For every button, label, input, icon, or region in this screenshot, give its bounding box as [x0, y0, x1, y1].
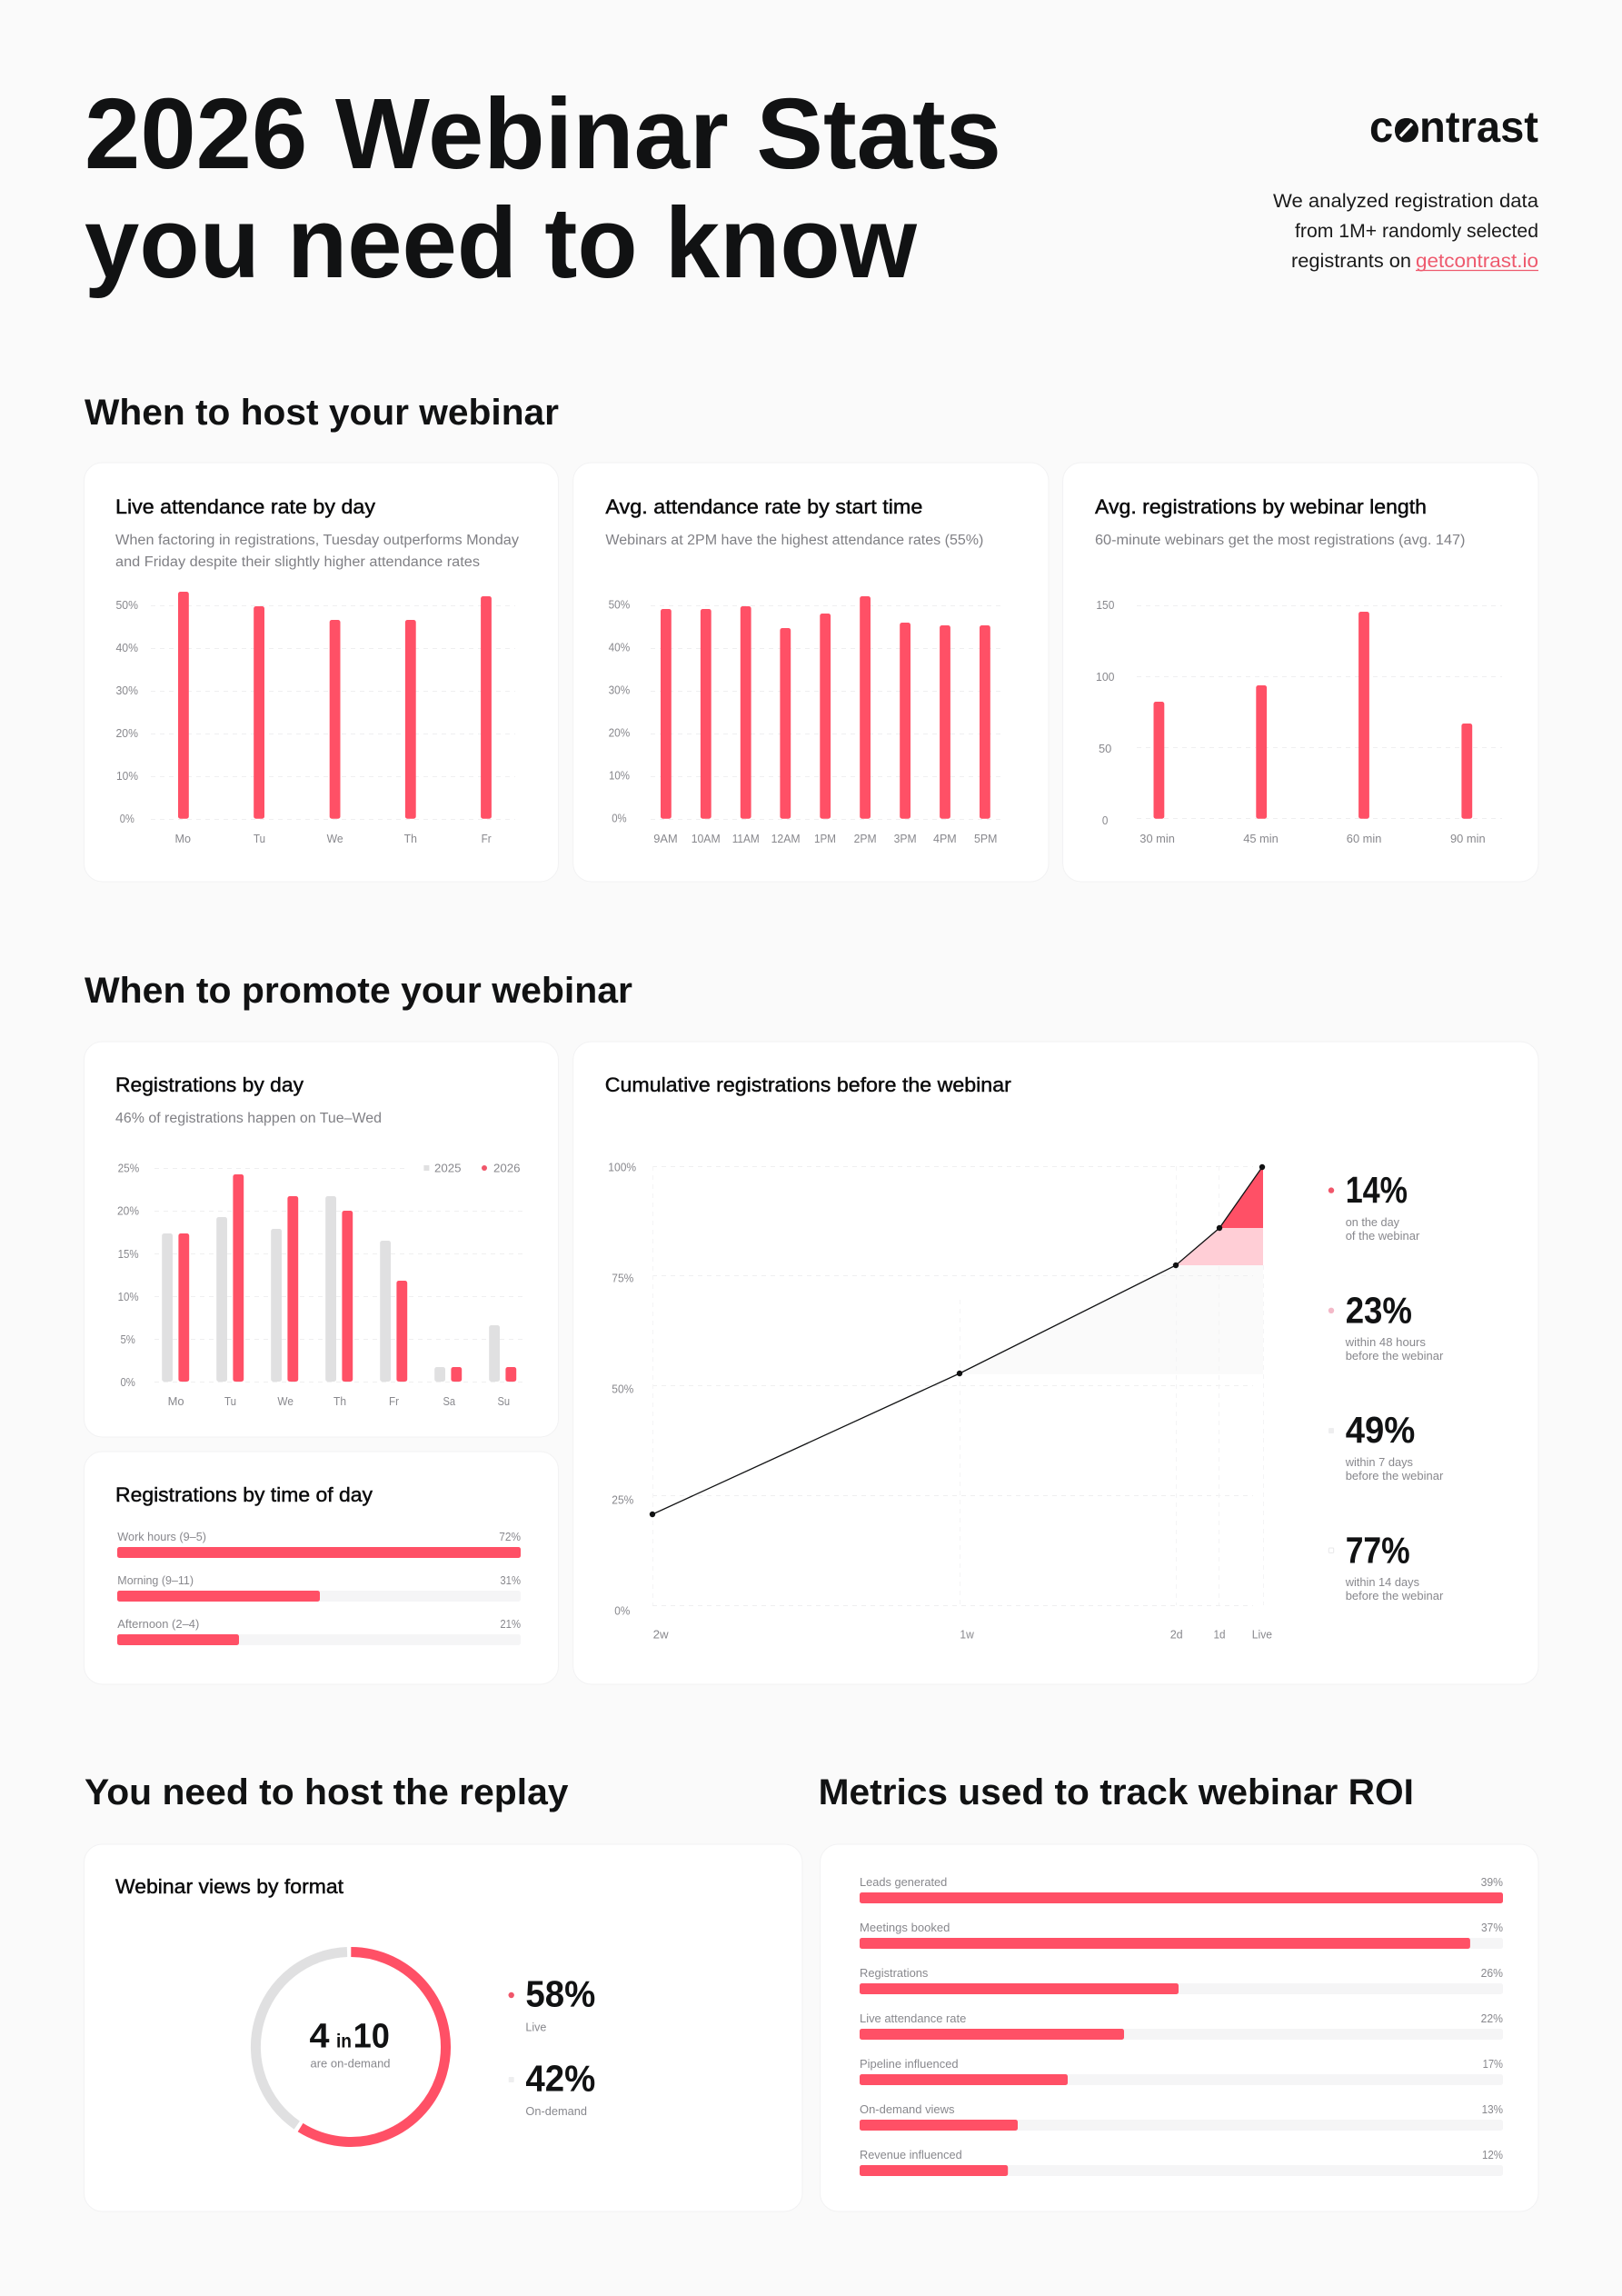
progress bars: metrics: 37%	[1481, 1921, 1503, 1934]
logo: contrast: contrast	[1369, 104, 1538, 152]
bar chart: registrations by length: 50	[1099, 742, 1111, 755]
line chart: cumulative registrations: 1d	[1214, 1627, 1225, 1642]
line chart: cumulative registrations: 2w	[653, 1627, 669, 1642]
chart title: Cumulative registrations before the webinar	[605, 1073, 1011, 1096]
stat: 77% within 14 days: within 14 days	[1345, 1575, 1419, 1589]
bar chart: registrations by day, 2025 vs 2026: 5%	[120, 1333, 135, 1346]
bar chart: attendance by start time: 0%	[612, 811, 627, 825]
chart description: When factoring in registrations, Tuesday outperforms Monday	[115, 533, 519, 548]
bar chart: attendance by day: 30%	[116, 684, 138, 697]
bar chart: attendance by day: 0%	[120, 812, 134, 825]
bar chart: registrations by length: 100	[1096, 670, 1114, 684]
stat: 77% within 14 days: 77%	[1346, 1529, 1410, 1571]
progress bars: metrics: 13%	[1482, 2102, 1503, 2116]
bar chart: registrations by length: 60 min	[1347, 832, 1381, 845]
line chart: cumulative registrations: Live	[1252, 1627, 1272, 1642]
chart title: Registrations by time of day	[115, 1483, 373, 1506]
bar chart: registrations by day, 2025 vs 2026: 15%	[118, 1247, 139, 1261]
stat: 42% on-demand: On-demand	[525, 2104, 587, 2118]
bar chart: registrations by day, 2025 vs 2026: Th	[333, 1394, 346, 1408]
stat: 49% within 7 days: within 7 days	[1345, 1455, 1413, 1469]
bar chart: attendance by day: 10%	[116, 769, 138, 783]
bar chart: attendance by day: Fr	[482, 832, 492, 845]
bar chart: attendance by day	[116, 592, 515, 845]
title: 2026 Webinar Stats	[85, 78, 1001, 190]
bar chart: attendance by day: Th	[404, 832, 417, 845]
bar chart: attendance by start time: 50%	[609, 598, 631, 611]
bar chart: registrations by length: 30 min	[1139, 832, 1175, 845]
bar chart: registrations by length: 150	[1096, 598, 1114, 612]
bar chart: attendance by start time: 10%	[609, 769, 630, 782]
bar chart: registrations by day, 2025 vs 2026: 10%	[118, 1290, 139, 1303]
progress bars: metrics: On-demand views	[860, 2102, 955, 2116]
line chart: cumulative registrations: 75%	[612, 1271, 634, 1285]
line chart: cumulative registrations: 100%	[608, 1160, 637, 1174]
chart description: 46% of registrations happen on Tue–Wed	[115, 1111, 382, 1126]
stat: 49% within 7 days	[1328, 1409, 1444, 1482]
bar chart: attendance by day: 50%	[116, 598, 138, 612]
heading: metrics: Metrics used to track webinar ROI	[819, 1772, 1414, 1812]
stat: 42% on-demand: 42%	[525, 2058, 595, 2100]
progress bars: metrics: 17%	[1483, 2057, 1503, 2071]
bar chart: attendance by start time: 3PM	[894, 832, 917, 845]
chart title: Registrations by day	[115, 1073, 304, 1096]
bar chart: registrations by day, 2025 vs 2026: Mo	[168, 1394, 184, 1408]
chart description: Webinars at 2PM have the highest attendance rates (55%)	[605, 533, 983, 548]
progress bars: metrics: Leads generated	[860, 1875, 947, 1889]
stat: 23% within 48 hours	[1328, 1289, 1444, 1363]
intro text: from 1M+ randomly selected	[1295, 221, 1538, 242]
line chart: cumulative registrations: 25%	[612, 1492, 634, 1507]
bar chart: attendance by start time	[609, 596, 1005, 845]
bar chart: registrations by day, 2025 vs 2026: Su	[498, 1394, 510, 1408]
bar chart: attendance by start time: 5PM	[974, 832, 997, 845]
progress bars: metrics: Revenue influenced	[860, 2148, 962, 2161]
progress bars: metrics: 12%	[1482, 2148, 1503, 2161]
donut centre label: 10	[353, 2018, 390, 2056]
progress bars: time of day: Work hours (9–5)	[117, 1530, 206, 1543]
donut chart	[255, 1952, 446, 2141]
line chart: cumulative registrations: 50%	[612, 1382, 634, 1396]
donut centre label: 4	[309, 2018, 329, 2056]
bar chart: registrations by day, 2025 vs 2026: Tu	[224, 1394, 236, 1408]
stat: 14% on the day: of the webinar	[1346, 1229, 1420, 1243]
panel: attendance rate by start time	[573, 463, 1049, 882]
line chart: cumulative registrations: 2d	[1170, 1627, 1183, 1642]
bar chart: registrations by day, 2025 vs 2026: 20%	[117, 1203, 139, 1218]
progress bars: time of day: 72%	[499, 1530, 521, 1543]
stat: 77% within 14 days	[1328, 1529, 1444, 1602]
stat: 58% live	[509, 1973, 595, 2034]
bar chart: attendance by start time: 11AM	[732, 832, 760, 845]
stat: 23% within 48 hours: 23%	[1346, 1289, 1412, 1331]
bar chart: registrations by length: 90 min	[1450, 832, 1486, 845]
progress bars: metrics: Registrations	[860, 1966, 929, 1980]
title: you need to know	[85, 187, 917, 299]
donut centre label: in	[336, 2031, 352, 2052]
bar chart: attendance by day: We	[327, 832, 343, 845]
progress bars: metrics: 22%	[1481, 2011, 1503, 2025]
bar chart: attendance by start time: 40%	[609, 640, 631, 654]
bar chart: registrations by day, 2025 vs 2026: Fr	[389, 1394, 400, 1408]
bar chart: registrations by day, 2025 vs 2026	[117, 1162, 523, 1408]
panel: live attendance rate by day	[84, 463, 558, 882]
stat: 42% on-demand	[509, 2058, 595, 2118]
bar chart: registrations by length: 0	[1102, 814, 1108, 827]
line chart: cumulative registrations	[608, 1160, 1272, 1642]
stat: 58% live: Live	[525, 2020, 546, 2034]
progress bars: time of day: 21%	[500, 1617, 521, 1631]
bar chart: attendance by start time: 9AM	[653, 832, 678, 845]
stat: 14% on the day: on the day	[1346, 1215, 1399, 1229]
bar chart: registrations by day, 2025 vs 2026: 0%	[120, 1375, 135, 1389]
stat: 23% within 48 hours: within 48 hours	[1345, 1335, 1426, 1349]
bar chart: registrations by day, 2025 vs 2026: 25%	[118, 1162, 140, 1174]
legend: 2025	[434, 1162, 462, 1174]
panel: registrations by time of day	[84, 1452, 558, 1684]
progress bars: time of day: 31%	[500, 1573, 521, 1587]
legend	[423, 1162, 520, 1174]
progress bars: metrics: Live attendance rate	[860, 2011, 966, 2025]
intro text: getcontrast.io	[1416, 251, 1538, 272]
bar chart: attendance by start time: 4PM	[933, 832, 957, 845]
intro text: registrants on	[1291, 251, 1411, 272]
heading: when to host: When to host your webinar	[85, 393, 559, 433]
stat: 23% within 48 hours: before the webinar	[1346, 1349, 1444, 1363]
chart description: 60-minute webinars get the most registrations (avg. 147)	[1095, 533, 1465, 548]
bar chart: attendance by day: Mo	[174, 832, 191, 845]
stat: 14% on the day: 14%	[1346, 1169, 1408, 1211]
chart title: Webinar views by format	[115, 1875, 343, 1898]
stat: 49% within 7 days: 49%	[1346, 1409, 1415, 1451]
donut centre label: are on-demand	[311, 2056, 391, 2071]
progress bars: time of day	[117, 1530, 521, 1645]
chart description: and Friday despite their slightly higher attendance rates	[115, 554, 480, 570]
title	[85, 78, 1001, 299]
chart title: Avg. registrations by webinar length	[1095, 495, 1427, 518]
progress bars: metrics: 39%	[1481, 1875, 1503, 1889]
bar chart: attendance by start time: 30%	[609, 684, 631, 696]
legend: 2026	[493, 1162, 520, 1174]
stat: 77% within 14 days: before the webinar	[1346, 1589, 1444, 1602]
line chart: cumulative registrations: 1w	[960, 1627, 974, 1642]
bar chart: attendance by start time: 10AM	[692, 832, 721, 845]
panel: webinar views by format	[84, 1844, 802, 2211]
progress bars: metrics: Meetings booked	[860, 1921, 950, 1934]
bar chart: attendance by start time: 20%	[609, 725, 631, 740]
bar chart: attendance by day: Tu	[254, 832, 265, 845]
intro text	[1273, 191, 1538, 272]
bar chart: attendance by day: 20%	[116, 726, 138, 740]
bar chart: registrations by day, 2025 vs 2026: We	[277, 1394, 294, 1408]
stat: 14% on the day	[1328, 1169, 1420, 1243]
stat: 49% within 7 days: before the webinar	[1346, 1469, 1444, 1482]
panel: registrations by day	[84, 1042, 558, 1437]
bar chart: attendance by start time: 1PM	[814, 832, 836, 845]
bar chart: attendance by start time: 12AM	[771, 832, 801, 845]
intro text: We analyzed registration data	[1273, 191, 1538, 212]
bar chart: attendance by day: 40%	[116, 641, 138, 654]
line chart: cumulative registrations: 0%	[614, 1603, 631, 1618]
progress bars: metrics	[860, 1875, 1503, 2176]
progress bars: time of day: Afternoon (2–4)	[117, 1617, 199, 1631]
stat: 58% live: 58%	[525, 1973, 595, 2015]
heading: when to promote: When to promote your webinar	[85, 971, 632, 1011]
panel: ROI metrics	[820, 1844, 1538, 2211]
chart title: Avg. attendance rate by start time	[605, 495, 922, 518]
progress bars: metrics: Pipeline influenced	[860, 2057, 959, 2071]
bar chart: attendance by start time: 2PM	[854, 832, 877, 845]
donut centre label	[309, 2018, 391, 2071]
chart title: Live attendance rate by day	[115, 495, 375, 518]
progress bars: metrics: 26%	[1481, 1966, 1503, 1980]
panel: registrations by webinar length	[1063, 463, 1538, 882]
progress bars: time of day: Morning (9–11)	[117, 1573, 194, 1587]
panel: cumulative registrations	[573, 1042, 1538, 1684]
bar chart: registrations by day, 2025 vs 2026: Sa	[443, 1394, 456, 1408]
bar chart: registrations by length: 45 min	[1243, 832, 1279, 845]
chart description	[115, 533, 519, 570]
bar chart: registrations by length	[1096, 598, 1502, 845]
heading: replay: You need to host the replay	[85, 1772, 569, 1812]
